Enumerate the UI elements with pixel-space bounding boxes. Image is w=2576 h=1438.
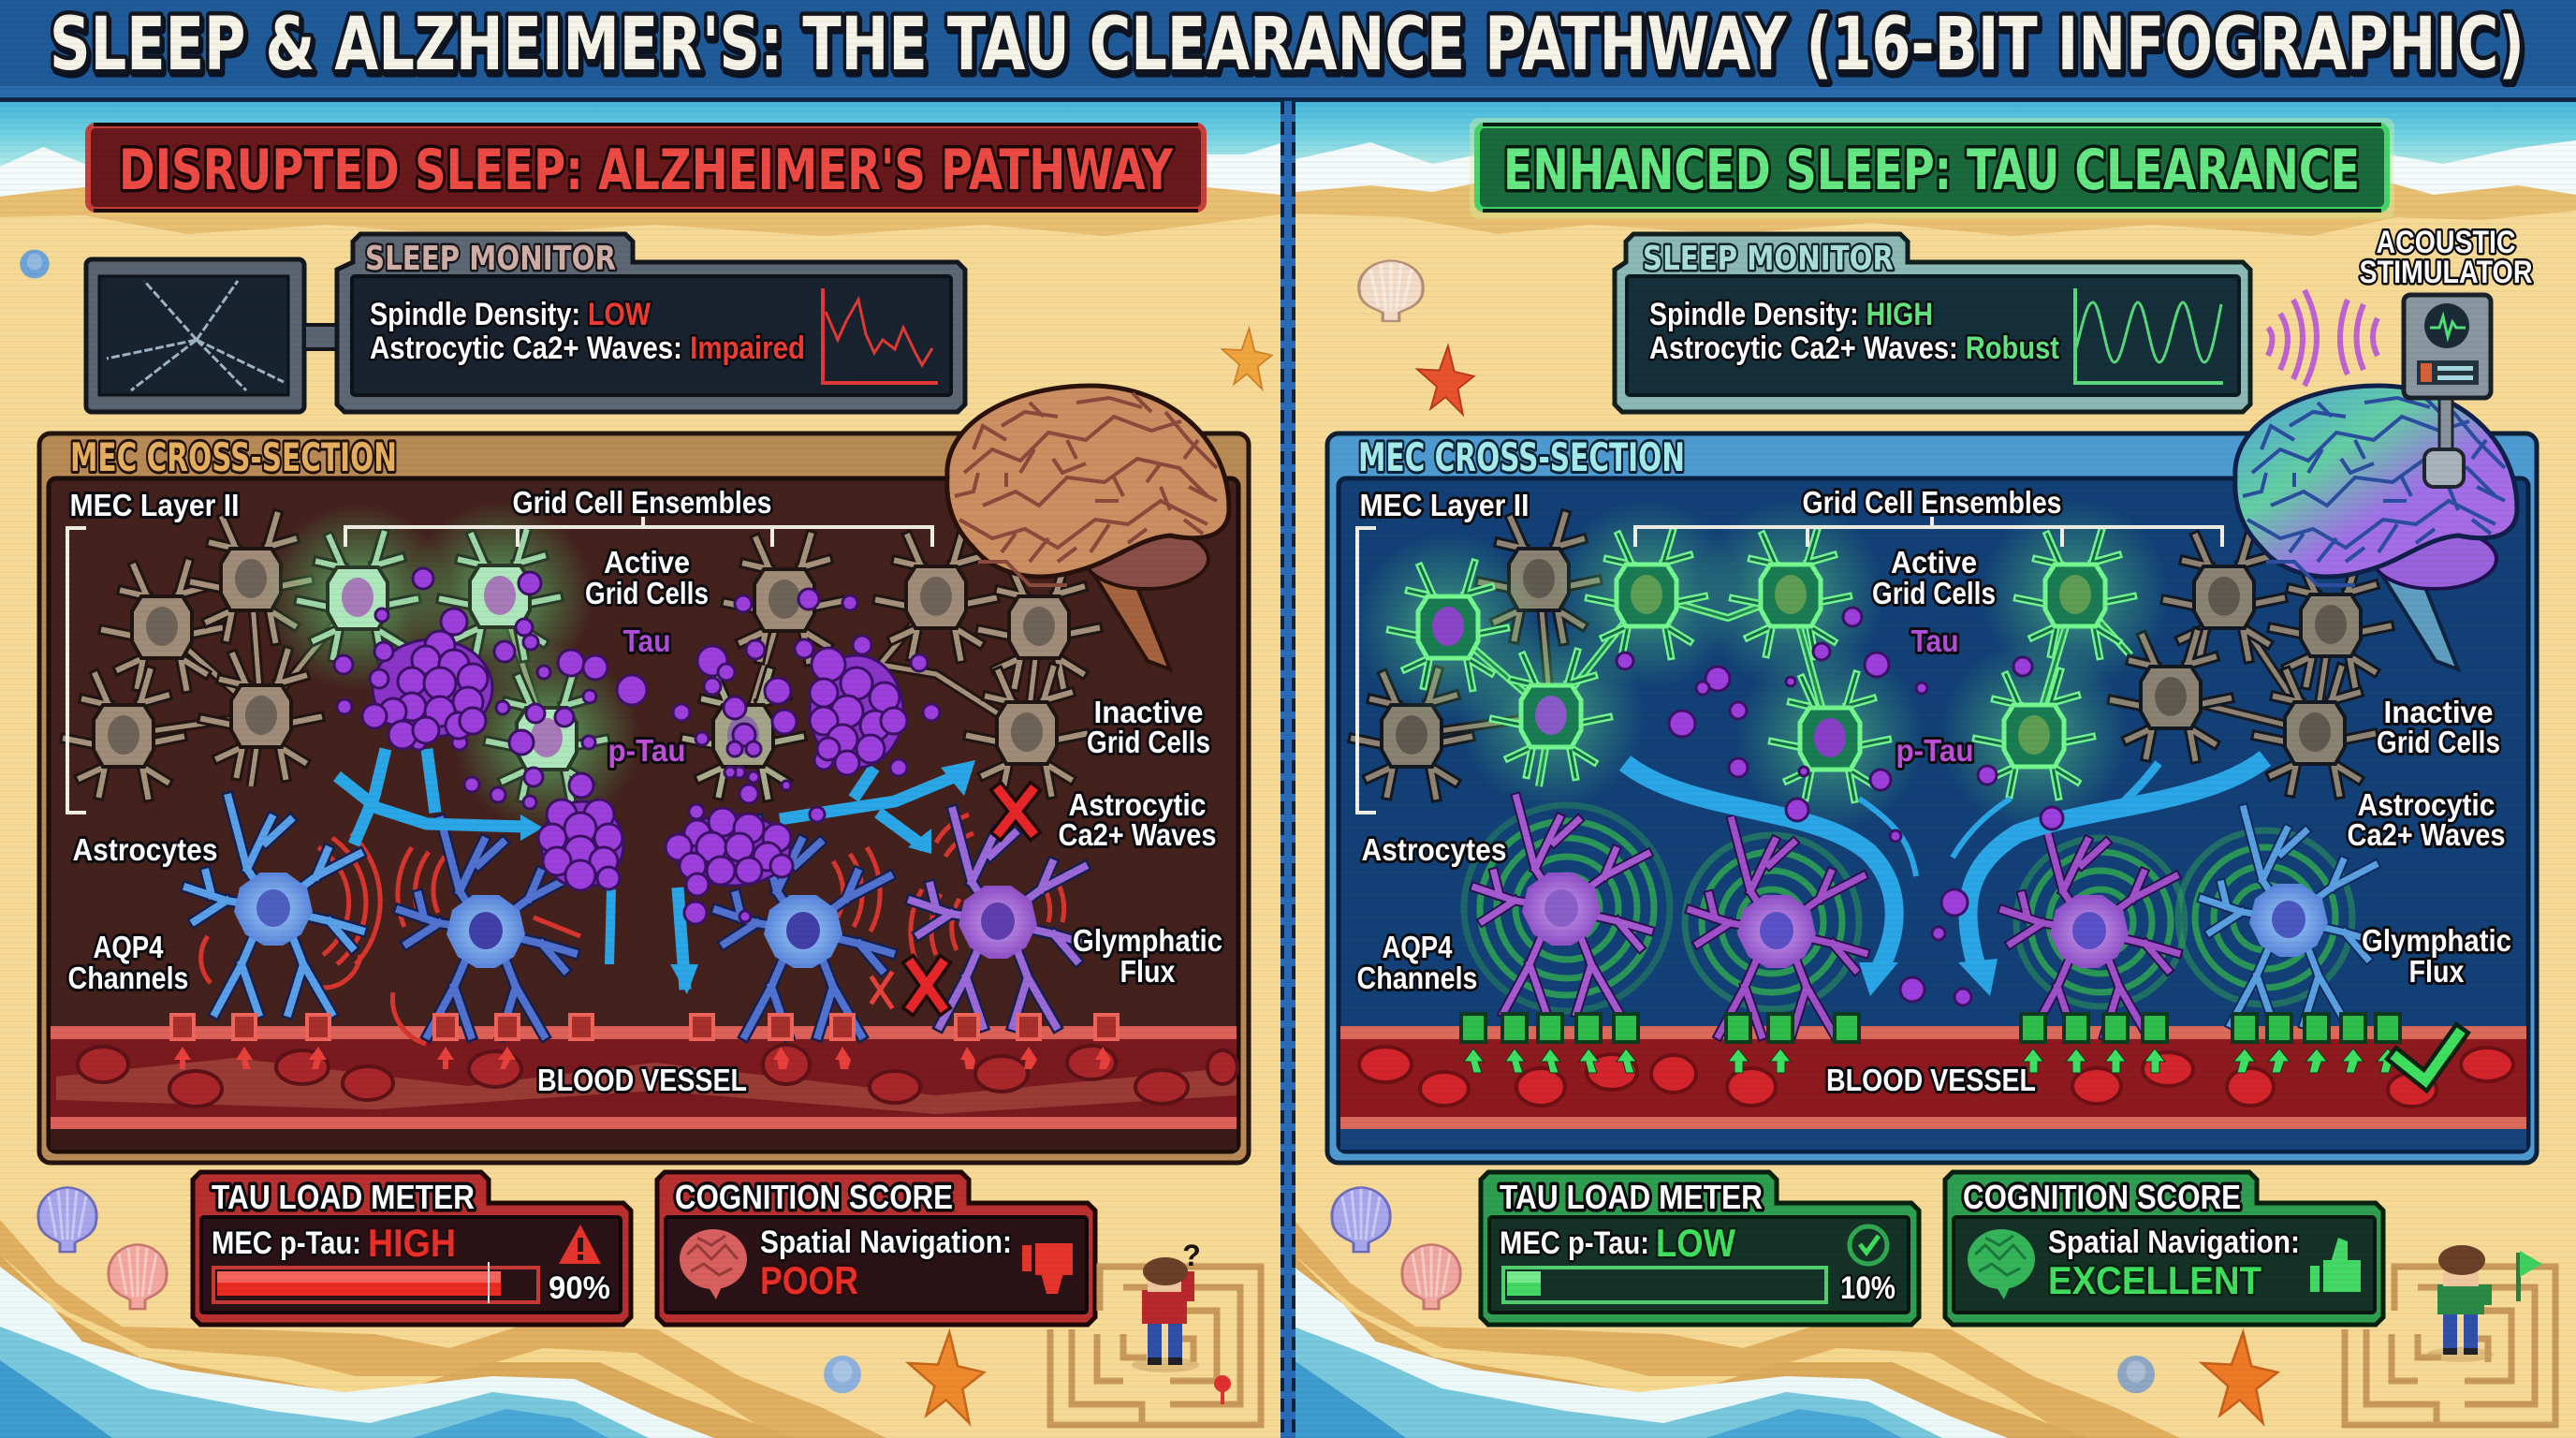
labels: Astrocytes [73,832,217,867]
blue flux arrows [1625,758,2265,996]
check icon [1850,1226,1887,1264]
right maze [2345,1267,2555,1425]
labels: Astrocytic [1069,787,1206,822]
red blood cells [78,1045,1237,1107]
labels: Astrocytes [1361,832,1507,867]
labels: MEC Layer II [69,488,240,522]
spindle graph [2075,288,2223,383]
labels: AQP4 [94,930,164,964]
device body [2404,295,2491,398]
blood vessel [51,1026,1237,1150]
right cognition score [1945,1172,2383,1325]
labels: p-Tau [608,733,685,768]
labels: Inactive [1093,695,1204,729]
AQP4 channels green [1461,1014,2400,1042]
left confused person [1132,1239,1201,1372]
right cognition score: EXCELLENT [2048,1258,2261,1302]
monitor title: SLEEP MONITOR [1643,240,1894,278]
p-tau value: MEC p-Tau: [1500,1225,1649,1261]
labels: Glymphatic [2362,923,2511,958]
inactive grid cells [30,485,1133,829]
labels: Grid Cell Ensembles [513,485,771,520]
background: top water [0,101,2576,167]
percent: 10% [1840,1270,1895,1306]
banner heading: DISRUPTED SLEEP: ALZHEIMER'S PATHWAY [119,138,1174,203]
labels: Grid Cell Ensembles [1803,485,2061,520]
labels: BLOOD VESSEL [537,1063,747,1097]
small red flow arrows [174,1047,1111,1069]
progress bar [1503,1268,1826,1302]
icon: right brain [2235,386,2517,669]
spindle graph [823,288,938,383]
thumbs down [1022,1243,1073,1294]
thumbs up [2310,1238,2361,1292]
brain icon [1968,1229,2035,1299]
cognition title: COGNITION SCORE [1963,1178,2241,1216]
inactive grid cells [1318,485,2424,829]
red pin [1214,1375,1231,1404]
stimulator label: ACOUSTIC [2376,225,2516,260]
labels: Tau [1911,624,1958,658]
icon: left brain [947,386,1229,669]
right sleep monitor [1615,234,2250,412]
labels: MEC Layer II [1359,488,1530,522]
cable and probe [2439,398,2452,454]
astrocytes [187,798,1086,1035]
left cognition score [657,1172,1095,1325]
left sleep monitor [337,234,965,412]
labels: Inactive [2383,695,2494,729]
panel title: MEC CROSS-SECTION [70,434,397,480]
warning icon [559,1225,601,1264]
grid cell axons [1448,594,2130,786]
labels [1357,485,2511,1097]
astrocyte green waves [1464,805,2352,1011]
left cognition score: POOR [760,1258,858,1302]
background: wet sand band [0,183,2576,236]
spatial navigation: Spatial Navigation: [2048,1225,2300,1260]
decor: left bottom shells [38,1187,167,1309]
left tau load meter: HIGH [368,1221,456,1265]
astrocytes [1475,798,2377,1035]
bottom right water and beach [1294,1220,2180,1438]
labels: BLOOD VESSEL [1826,1063,2036,1097]
tau particles [1617,608,2063,1005]
center divider [1281,101,1295,1438]
acoustic stimulator: STIMULATOR [2359,255,2533,290]
labels: Grid Cells [1087,725,1210,759]
question mark: ? [1182,1239,1201,1272]
decor: top left starfish [1222,329,1272,389]
dim active grid cells [264,502,640,831]
acoustic stimulator [2268,225,2533,487]
AQP4 channels red [171,1015,1118,1039]
astrocytic waves: Astrocytic Ca2+ Waves: Impaired [370,330,805,366]
labels: Channels [1357,961,1477,995]
tau aggregate fills [373,639,903,888]
meter title: TAU LOAD METER [1500,1178,1763,1216]
green check mark [2397,1034,2458,1080]
left cracked screen [86,259,338,412]
background: foam [0,140,2576,197]
left banner [88,123,1204,213]
monitor title: SLEEP MONITOR [365,240,616,278]
grid cell axons [124,579,1039,786]
labels: Ca2+ Waves [2348,817,2505,852]
labels: Grid Cells [2377,725,2500,759]
brain icon [680,1229,747,1299]
decor: right bottom shells [1332,1187,1460,1309]
active grid cells [1354,501,2169,831]
header bar [0,0,2576,102]
brackets [67,517,932,813]
labels: Active [604,545,690,580]
blue flux arrows blocked [337,749,975,994]
left tau load meter [193,1172,631,1325]
brackets [1357,517,2222,813]
astrocytic waves: Astrocytic Ca2+ Waves: Robust [1649,330,2059,366]
labels: Grid Cells [585,576,709,610]
labels: Astrocytic [2357,787,2496,822]
labels: AQP4 [1382,930,1453,964]
right happy person with flag [2426,1245,2542,1362]
labels [67,485,1222,1097]
spindle density: Spindle Density: HIGH [1649,297,1933,332]
decor: top right shell [1359,260,1423,321]
labels: Tau [623,624,670,658]
labels: Grid Cells [1872,576,1996,610]
labels: Ca2+ Waves [1058,817,1217,852]
blood vessel [1340,1026,2526,1150]
labels: Channels [67,961,189,995]
panel title: MEC CROSS-SECTION [1358,434,1685,480]
red X marks [872,791,1032,1006]
right tau load meter [1481,1172,1919,1325]
left maze [1050,1267,1261,1425]
labels: Flux [1120,954,1176,989]
astrocyte waves impaired [201,814,1064,1044]
p-tau value: MEC p-Tau: [212,1225,361,1261]
labels: Glymphatic [1073,923,1222,958]
labels: Active [1891,545,1977,580]
tau aggregates [334,568,940,924]
cognition title: COGNITION SCORE [675,1178,953,1216]
bottom left water and beach [0,1220,886,1438]
right banner [1470,118,2394,219]
decor: left bottom starfish [908,1332,984,1423]
spatial navigation: Spatial Navigation: [760,1225,1012,1260]
decor: right bottom pebble [2117,1356,2155,1393]
sound waves [2268,290,2378,386]
green flow arrows [1464,1049,2398,1073]
decor: top left pebble [20,250,50,278]
decor: top right starfish [1417,346,1474,415]
flag [2516,1253,2521,1301]
percent: 90% [549,1270,610,1306]
labels: p-Tau [1896,733,1973,768]
progress bar [213,1262,538,1303]
red blood cells [1359,1047,2513,1107]
panel: left MEC cross-section [30,433,1249,1163]
labels: Flux [2409,954,2465,989]
decor: right bottom starfish [2202,1332,2277,1423]
spindle density: Spindle Density: LOW [370,297,651,332]
meter title: TAU LOAD METER [212,1178,475,1216]
decor: left bottom pebble [824,1356,861,1393]
right tau load meter: LOW [1656,1221,1735,1265]
